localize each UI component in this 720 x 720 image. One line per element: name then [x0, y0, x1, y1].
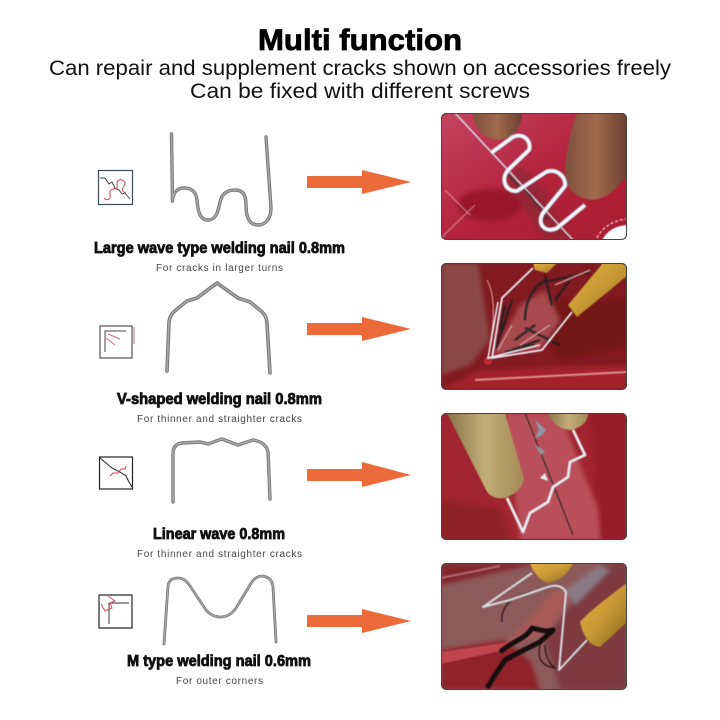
heading: V-shaped: V-shaped welding nail 0.8mm — [117, 391, 322, 408]
icon: V crack — [100, 326, 134, 358]
icon: large wave crack — [98, 170, 132, 204]
caption: V-shaped: For thinner and straighter cracks — [137, 414, 302, 425]
staple: large wave nail — [172, 134, 271, 225]
photo 4: M staple on outer corner — [441, 563, 627, 690]
heading: large wave: Large wave type welding nail 0.8mm — [94, 240, 345, 257]
subtitle line 1: Can repair and supplement cracks shown on accessories freely — [49, 57, 672, 80]
icon: M corner crack — [99, 595, 132, 628]
heading: M type: M type welding nail 0.6mm — [127, 653, 311, 670]
subtitle line 2: Can be fixed with different screws — [190, 80, 530, 103]
arrow 4 — [307, 609, 411, 633]
photo 3: linear wave staple on red panel — [441, 413, 627, 540]
arrow 2 — [307, 317, 411, 341]
caption: large wave: For cracks in larger turns — [156, 263, 283, 274]
caption: linear wave: For thinner and straighter cracks — [137, 549, 302, 560]
photo 1: large wave staple on red panel — [441, 113, 627, 240]
staple: V nail — [167, 283, 270, 373]
photo 2: V staple on charred red corner — [441, 263, 627, 390]
staple: linear wave — [173, 439, 270, 502]
title: Multi function — [258, 24, 462, 57]
arrow 3 — [307, 462, 411, 487]
arrow 1 — [307, 170, 411, 194]
heading: linear wave: Linear wave 0.8mm — [153, 526, 285, 543]
caption: M type: For outer corners — [176, 676, 263, 687]
icon: linear wave crack — [100, 457, 132, 489]
staple: M nail — [164, 576, 276, 644]
